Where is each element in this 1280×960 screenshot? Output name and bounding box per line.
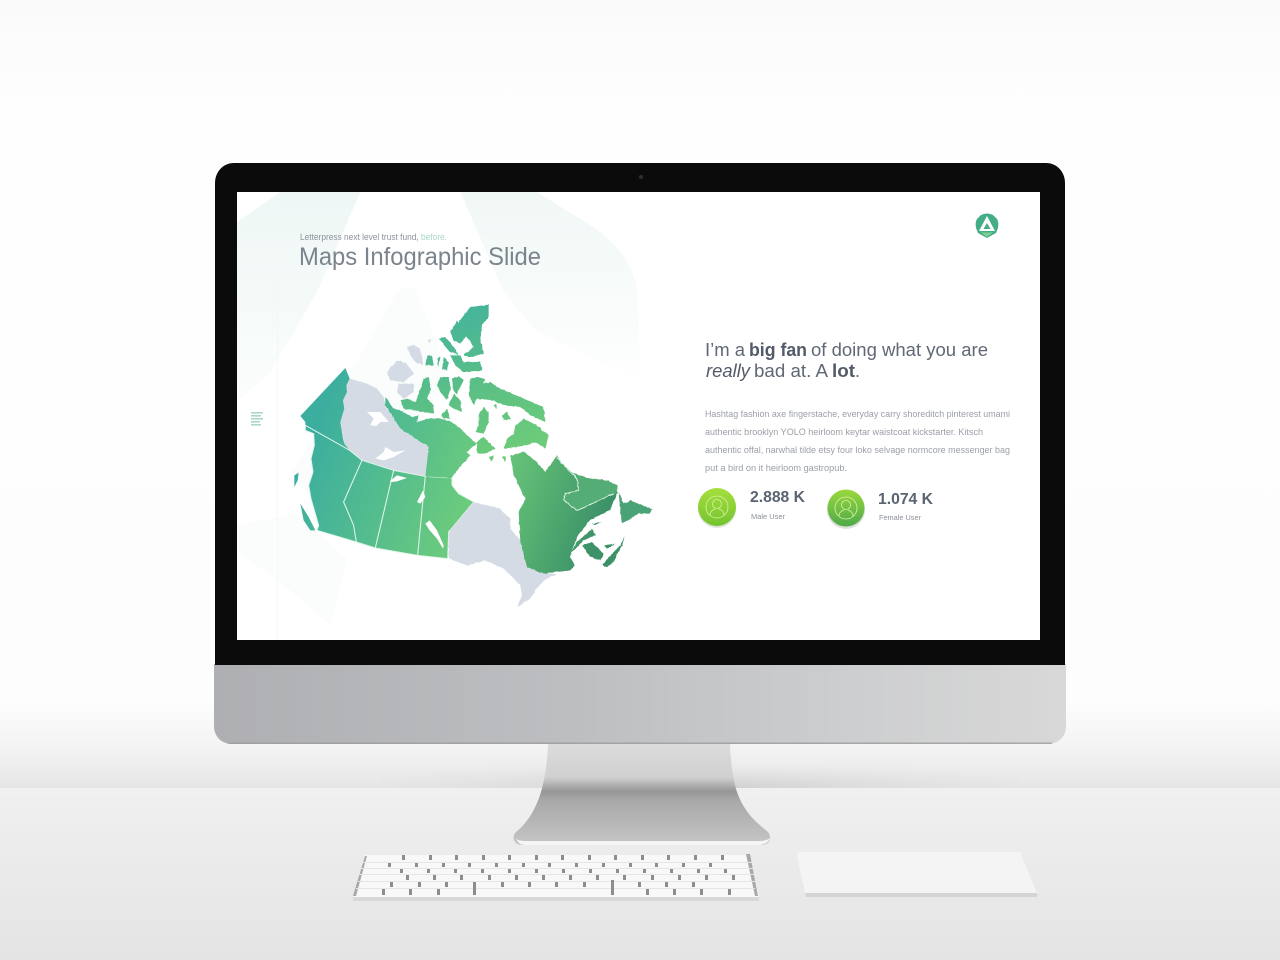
- Great Bear and Great Slave lakes: [367, 412, 405, 460]
- Saskatchewan: [375, 470, 425, 555]
- Baffin Island: [469, 377, 549, 449]
- headline: I’m a: [705, 340, 746, 360]
- trackpad: [797, 852, 1037, 897]
- Labrador: [557, 457, 618, 510]
- body paragraph: Hashtag fashion axe fingerstache, everyday carry shoreditch pinterest umami: [705, 409, 1010, 419]
- monitor: [214, 163, 1066, 744]
- stat: female user: Female User: [879, 513, 921, 522]
- stat: male user: 2.888 K: [750, 489, 806, 506]
- Quebec: [510, 452, 618, 574]
- body paragraph: [705, 409, 1010, 473]
- headline: big fan: [749, 340, 807, 360]
- Ellesmere Island: [450, 305, 489, 357]
- monitor chin: [214, 664, 1066, 744]
- screen: [237, 192, 1040, 640]
- headline: bad at. A: [754, 361, 828, 381]
- Melville Peninsula and Southampton Island: [475, 404, 510, 462]
- Manitoba: [418, 476, 474, 559]
- icon: male user: [698, 488, 736, 528]
- Vancouver Island and Haida Gwaii: [294, 473, 315, 530]
- headline: really: [706, 361, 751, 381]
- desk surface: [0, 788, 1280, 960]
- webcam: [639, 175, 643, 179]
- Ontario: [449, 502, 557, 607]
- logo: [976, 214, 998, 238]
- Yukon: [300, 368, 350, 450]
- slide subtitle: Letterpress next level trust fund, before.: [300, 232, 447, 242]
- keyboard: [353, 854, 759, 901]
- Northwest Territories: [340, 379, 429, 476]
- map of Canada: [294, 305, 652, 607]
- Alberta: [344, 460, 394, 548]
- Nunavut mainland: [385, 397, 477, 478]
- sidebar mini lines: [251, 412, 263, 426]
- Queen Elizabeth islands: [425, 337, 482, 372]
- monitor bezel: [215, 163, 1065, 665]
- rough coast group: [385, 305, 652, 607]
- monitor stand: [514, 744, 770, 845]
- Labrador border: [557, 457, 614, 510]
- British Columbia: [305, 425, 362, 542]
- stat: female user: [827, 490, 934, 529]
- slide background shapes: [237, 192, 639, 640]
- Arctic islands gray: [387, 339, 432, 399]
- stat: female user: 1.074 K: [878, 491, 934, 508]
- slide title: Maps Infographic Slide: [299, 243, 541, 271]
- headline: of doing what you are: [811, 340, 988, 360]
- body paragraph: authentic offal, narwhal tilde etsy four loko selvage normcore messenger bag: [705, 445, 1010, 455]
- headline: .: [855, 361, 860, 381]
- body paragraph: put a bird on it heirloom gastropub.: [705, 463, 847, 473]
- Gaspe and Maritimes: [570, 522, 625, 567]
- icon: female user: [827, 490, 865, 529]
- headline: [705, 340, 988, 381]
- Victoria and Banks islands: [400, 376, 464, 419]
- Newfoundland: [619, 492, 652, 524]
- stat: male user: Male User: [751, 512, 785, 521]
- headline: lot: [832, 361, 855, 381]
- prairie lakes: [390, 475, 444, 549]
- stat: male user: [698, 488, 806, 528]
- wall shadow behind monitor stand: [380, 744, 1020, 788]
- body paragraph: authentic brooklyn YOLO heirloom keytar waistcoat kickstarter. Kitsch: [705, 427, 983, 437]
